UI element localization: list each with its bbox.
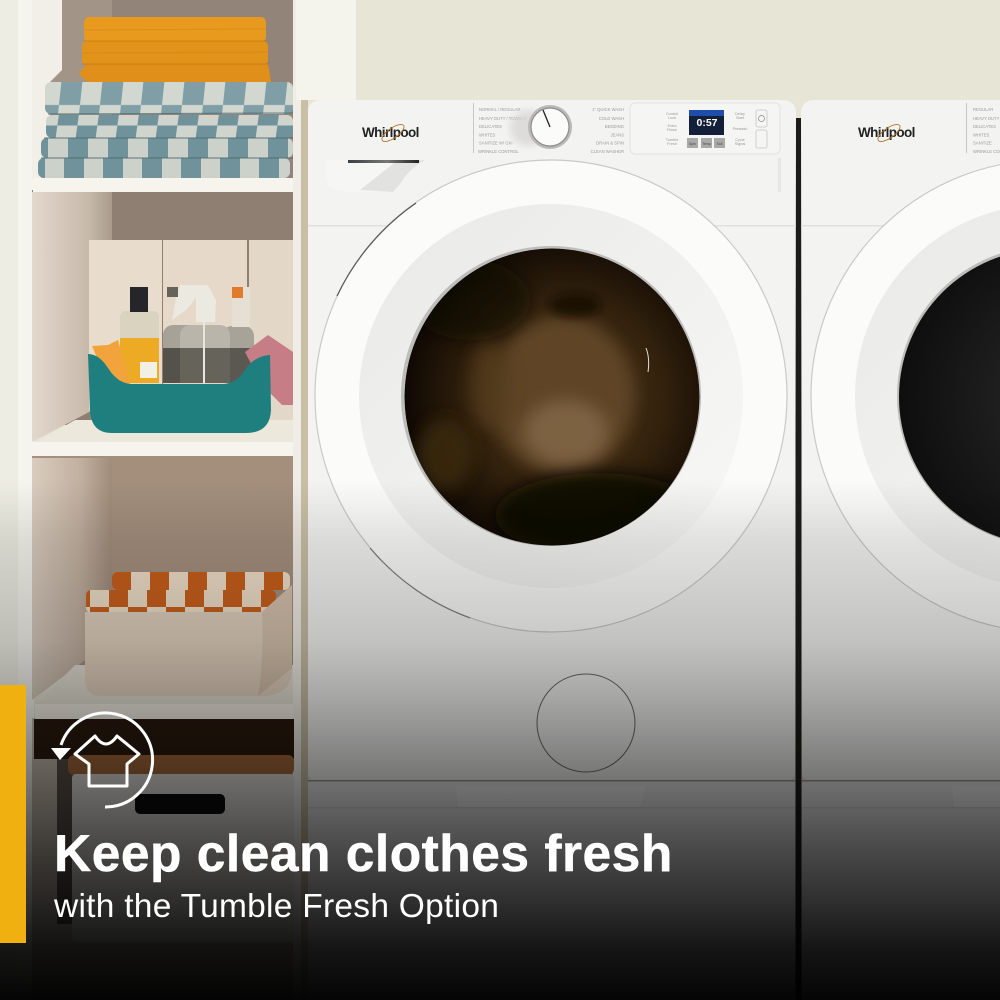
washer control panel: Cycle: [735, 138, 745, 142]
washer control panel: 0:57: [696, 117, 718, 129]
washer control panel: HEAVY DUTY / TOWELS: [479, 116, 527, 121]
washer control panel: Lock: [668, 116, 676, 120]
washer control panel: COLD WASH: [599, 116, 624, 121]
headline: Keep clean clothes fresh: [54, 824, 673, 882]
gap between appliances: [796, 118, 802, 1000]
washer control panel: DELICATES: [479, 124, 502, 129]
washer control panel: Soil: [717, 142, 723, 146]
second appliance: SANITIZE: [973, 140, 992, 146]
washer control panel: Signal: [735, 142, 745, 146]
bin with orange striped towel: [85, 572, 292, 696]
second appliance: Whirlpool: [858, 125, 915, 140]
washer control panel: Temp: [702, 142, 711, 146]
second appliance: HEAVY DUTY: [973, 116, 1000, 121]
washer door: [315, 160, 787, 632]
teal basket: [88, 354, 271, 433]
washer control panel: CLEAN WASHER: [591, 149, 624, 154]
cycle dial: [510, 105, 572, 149]
washer machine: [308, 100, 796, 781]
shelf boards: [33, 178, 294, 759]
orange towels: [79, 17, 271, 82]
yellow accent bar: [0, 685, 26, 943]
pump access cover: [537, 674, 635, 772]
washer control panel: 1" QUICK WASH: [592, 107, 624, 112]
washer control panel: Spin: [689, 142, 696, 146]
washer control panel: WRINKLE CONTROL: [478, 149, 519, 154]
second appliance: REGULAR: [973, 107, 993, 112]
washer control panel: Rinse: [667, 128, 677, 132]
washer control panel: Tumble: [666, 138, 678, 142]
dark gradient overlay: [0, 480, 1000, 1000]
washer control panel: JEANS: [610, 132, 624, 138]
icon: shirt with circular arrow: [51, 713, 153, 807]
detergent drawer: [326, 160, 425, 192]
subheading: with the Tumble Fresh Option: [54, 888, 499, 925]
storage box with handle slot: [57, 755, 294, 942]
washer control panel: Fresh: [667, 142, 677, 146]
washer control panel: SANITIZE W/ OXI: [479, 140, 513, 146]
door glass: [404, 248, 705, 557]
pink cloth: [245, 335, 293, 405]
second appliance: DELICATES: [973, 124, 996, 129]
second appliance: [801, 100, 1000, 781]
washer control panel: Start: [736, 116, 745, 120]
washer body: [308, 100, 796, 781]
washer control panel: Control: [666, 112, 678, 116]
cleaning bottles: [120, 285, 254, 384]
panel: shelving unit: [0, 0, 356, 1000]
washer control panel: [473, 103, 780, 154]
washer control panel: Delay: [735, 112, 745, 116]
yellow sponges: [92, 340, 130, 384]
brand logo: Whirlpool: [362, 125, 419, 140]
washer control panel: DRAIN & SPIN: [596, 140, 624, 146]
washer control panel: WHITES: [479, 132, 495, 138]
second appliance: WHITES: [973, 132, 989, 138]
washer control panel: Extra: [668, 124, 677, 128]
pedestals: [308, 780, 1000, 1000]
washer control panel: NORMAL / REGULAR: [479, 107, 520, 112]
paper towel rolls: [89, 240, 293, 420]
washer control panel: Prewash: [733, 127, 747, 131]
brand logo: [362, 121, 419, 145]
blue checkered towels: [38, 82, 293, 178]
washer control panel: BEDDING: [605, 124, 624, 129]
